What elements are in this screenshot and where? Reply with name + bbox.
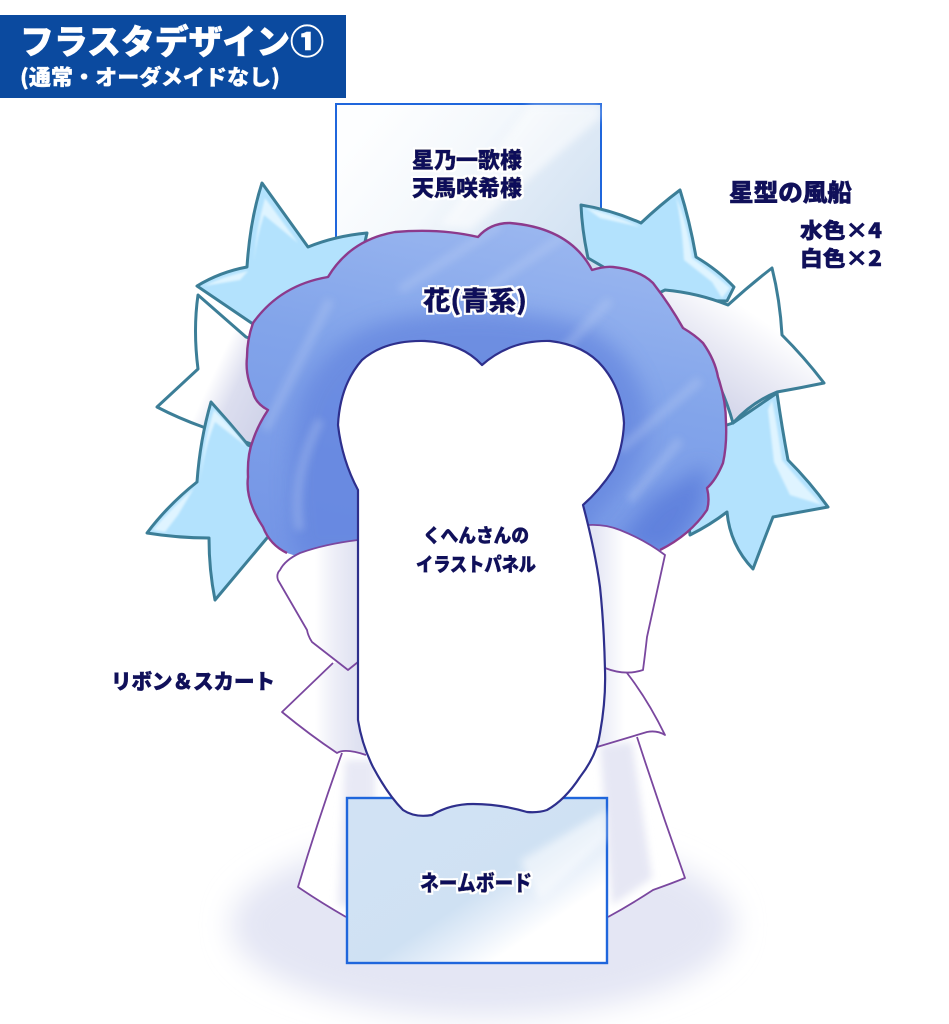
label: top name board text: 星乃一歌様 bbox=[412, 143, 522, 175]
label: top name board text bbox=[412, 143, 522, 203]
panel: illustration panel bbox=[338, 341, 624, 816]
star balloon: light blue top right bbox=[581, 190, 734, 301]
label: name board: ネームボード bbox=[420, 866, 532, 898]
label: ribbon and skirt: リボン＆スカート bbox=[111, 666, 275, 696]
label: top name board text: 天馬咲希様 bbox=[412, 171, 522, 203]
star balloon: light blue lower right bbox=[680, 393, 828, 569]
floor shadow bbox=[231, 833, 735, 1017]
ribbon: right upper bbox=[588, 525, 665, 673]
ribbon: right lower bbox=[597, 668, 665, 747]
flower bouquet bbox=[247, 223, 726, 570]
star balloon: light blue lower left bbox=[147, 402, 300, 600]
skirt: right bbox=[590, 737, 685, 917]
label: illustration panel text bbox=[416, 521, 536, 577]
star balloon: light blue top left bbox=[197, 183, 367, 340]
star balloon: white right bbox=[655, 268, 824, 423]
skirt: left bbox=[298, 753, 380, 917]
title: フラスタデザイン① bbox=[20, 15, 324, 64]
ribbon: left lower bbox=[282, 660, 366, 755]
label: illustration panel text: イラストパネル bbox=[416, 550, 536, 577]
label: flowers: 花(青系) bbox=[423, 281, 527, 318]
label: balloon counts: 白色×2 bbox=[800, 243, 882, 273]
header banner bbox=[0, 15, 346, 98]
panel: bottom name board bbox=[347, 798, 607, 963]
subtitle: (通常・オーダメイドなし) bbox=[20, 61, 280, 92]
label: balloon counts: 水色×4 bbox=[800, 215, 882, 245]
star balloon: white left bbox=[157, 295, 268, 450]
label: star balloons: 星型の風船 bbox=[729, 173, 852, 208]
panel: top name board bbox=[336, 104, 601, 314]
label: balloon counts bbox=[800, 215, 882, 273]
label: illustration panel text: くへんさんの bbox=[423, 521, 529, 548]
ribbon: left upper bbox=[277, 540, 362, 670]
